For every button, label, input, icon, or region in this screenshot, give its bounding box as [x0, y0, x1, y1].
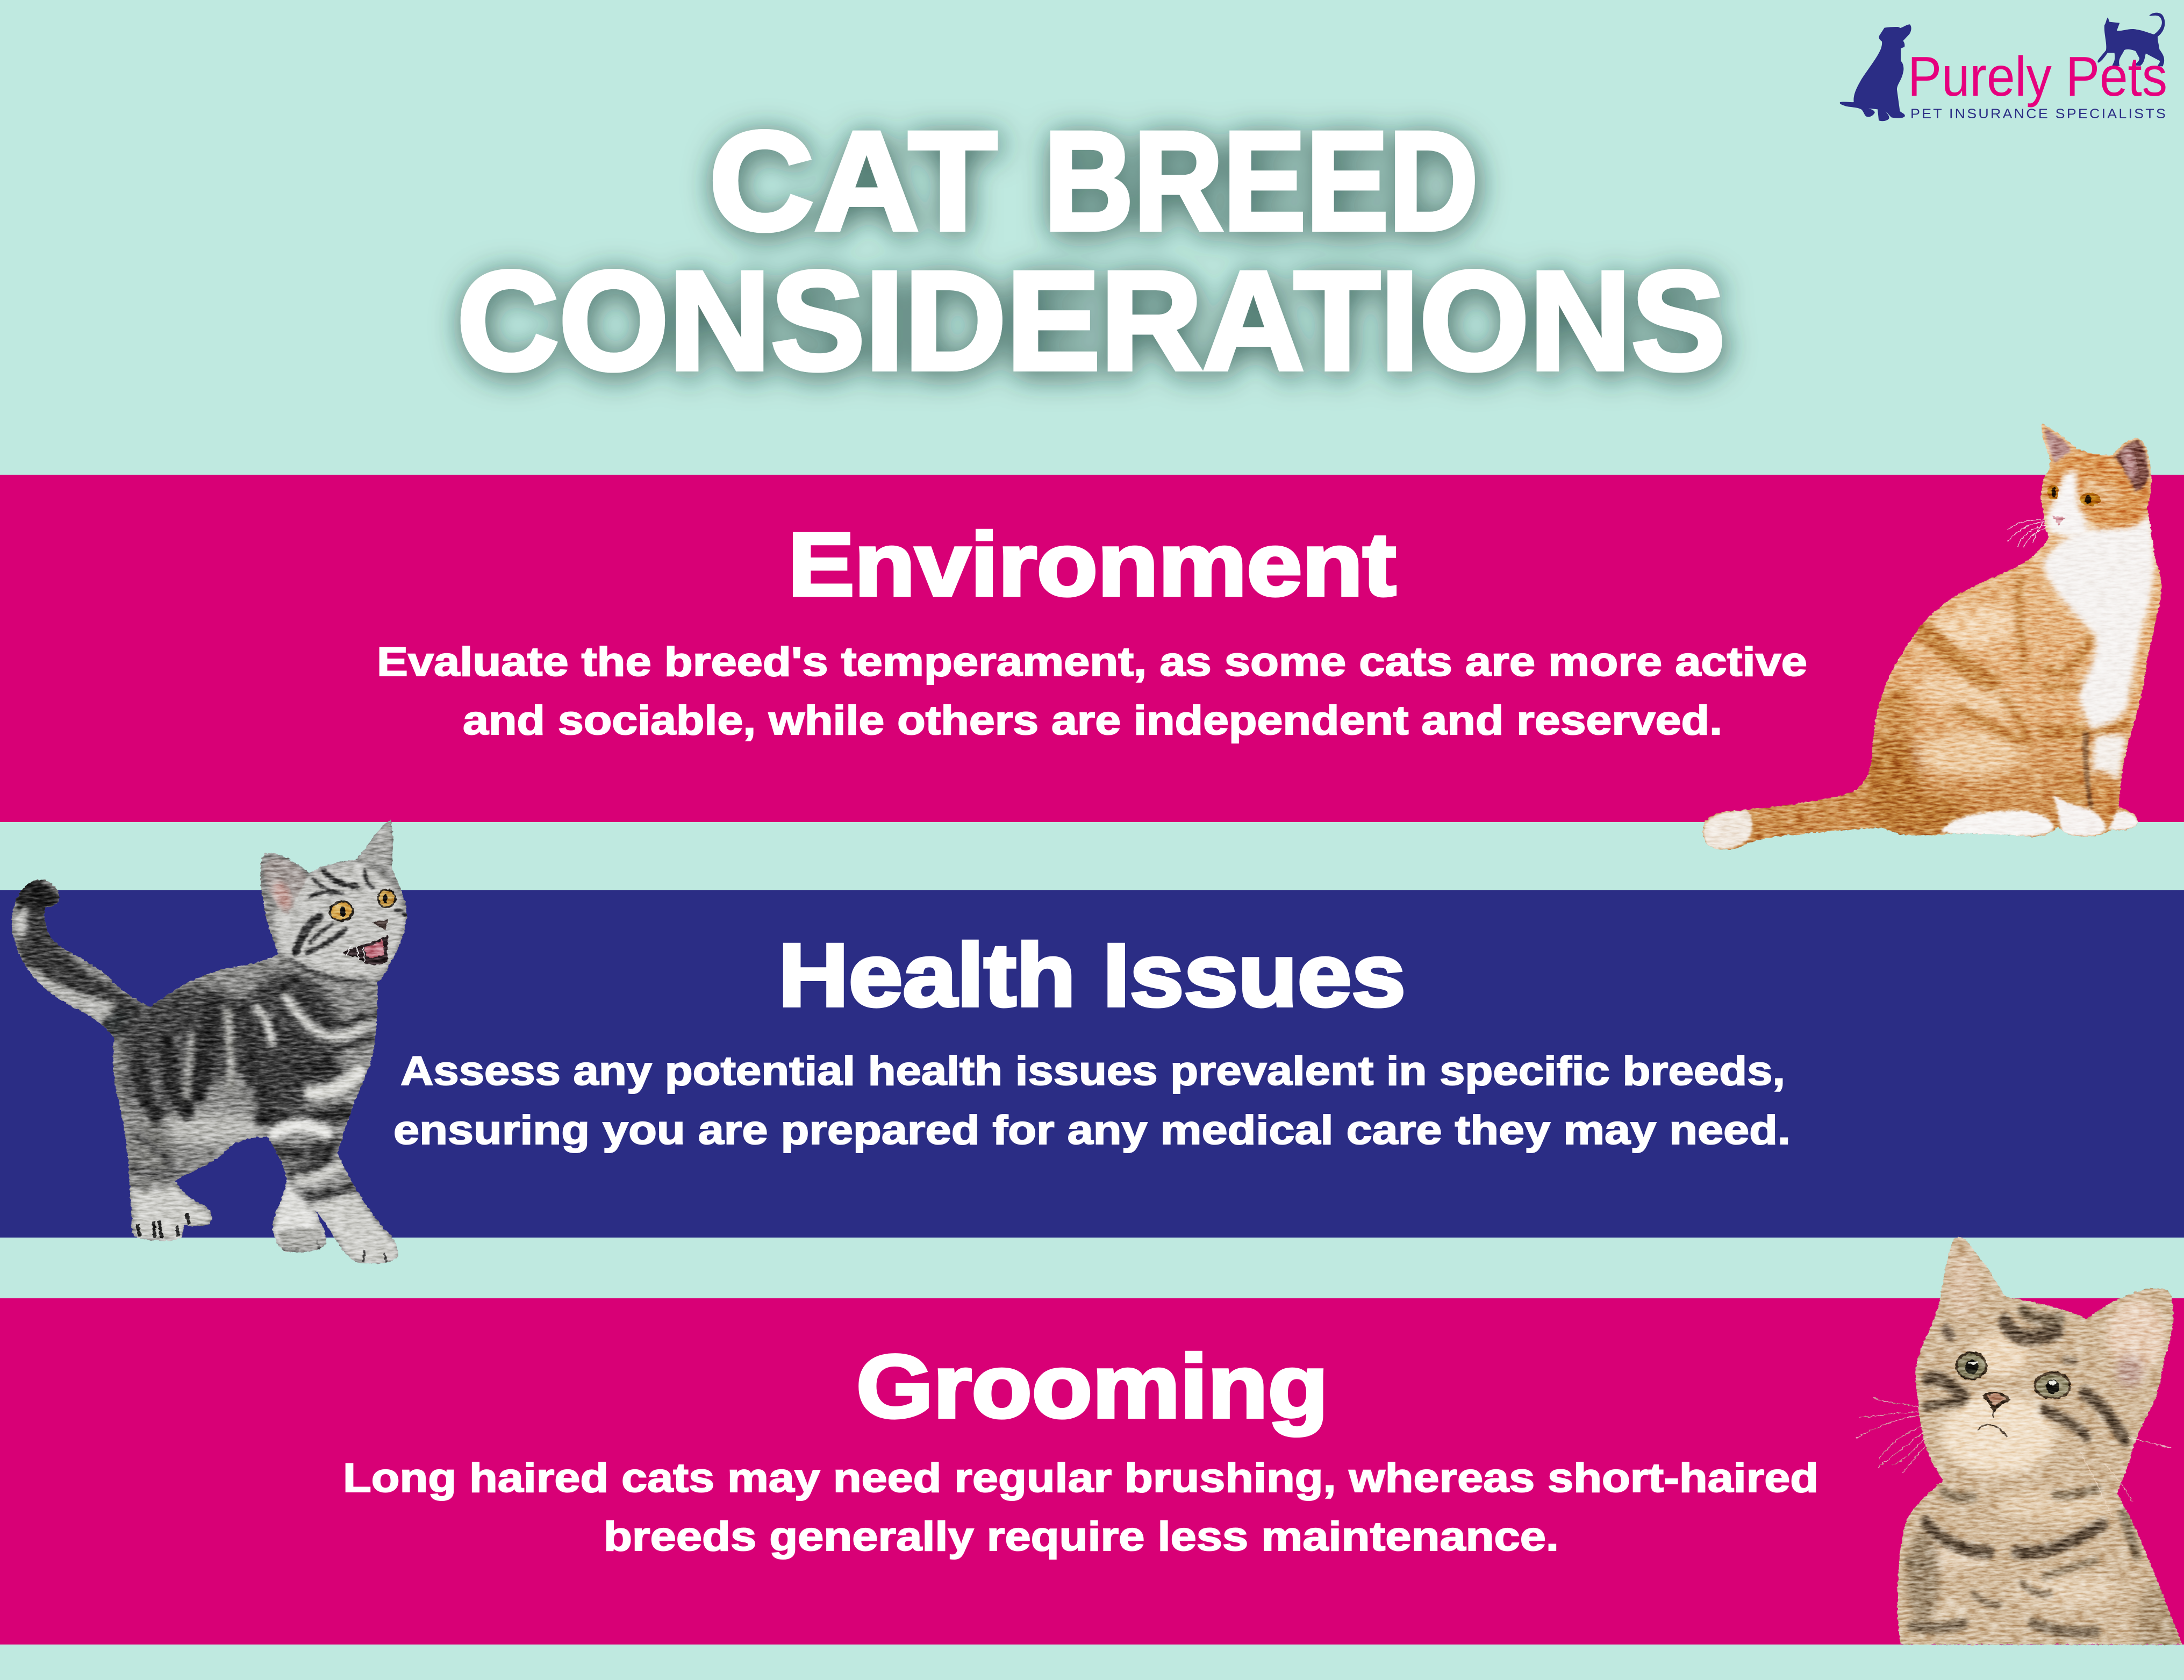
title: CAT — [709, 102, 997, 260]
head — [2044, 452, 2151, 528]
text: grooming description: breeds generally require less maintenance. — [604, 1514, 1559, 1560]
panel: environment — [0, 475, 2184, 822]
text: health issues description: ensuring you are prepared for any medical care they may need. — [393, 1107, 1791, 1153]
nose and mouth — [371, 919, 388, 930]
panel: grooming — [0, 1298, 2184, 1645]
text: grooming description — [343, 1455, 1818, 1560]
panel: health issues — [0, 890, 2184, 1238]
text: environment description: and sociable, while others are independent and reserved. — [463, 698, 1722, 744]
nose and mouth — [1982, 1392, 2010, 1412]
paws — [1940, 810, 2053, 837]
text: environment description: Evaluate the breed's temperament, as some cats are more active — [377, 639, 1807, 685]
text: health issues description: Assess any potential health issues prevalent in specific breeds, — [400, 1048, 1785, 1094]
heading: health issues: Health Issues — [778, 926, 1406, 1025]
heading: environment: Environment — [788, 515, 1396, 614]
whiskers — [1856, 1397, 2171, 1517]
body markings — [118, 973, 340, 1190]
title — [457, 102, 1725, 399]
eyes — [329, 900, 354, 921]
title: BREED — [1044, 102, 1478, 260]
logo tagline: PET INSURANCE SPECIALISTS — [1910, 106, 2167, 121]
eyes — [1956, 1352, 1987, 1380]
icon: dog silhouette — [1840, 24, 1911, 121]
logo: Purely Pets — [1840, 13, 2167, 121]
title: CONSIDERATIONS — [457, 242, 1725, 399]
text: grooming description: Long haired cats may need regular brushing, whereas short-haired — [343, 1455, 1818, 1501]
tail shading — [12, 879, 151, 1037]
whiskers — [2008, 519, 2047, 547]
cat photo: silver tabby kitten — [12, 820, 407, 1263]
text: health issues description — [393, 1048, 1791, 1153]
text: environment description — [377, 639, 1807, 744]
cat photo: ginger and white cat — [1703, 424, 2161, 849]
heading: grooming: Grooming — [856, 1337, 1328, 1436]
cat photo: tabby kitten portrait — [1856, 1236, 2182, 1664]
legs and paws — [132, 1184, 211, 1241]
white chest — [2042, 515, 2154, 730]
head — [274, 861, 406, 978]
icon: cat silhouette — [2097, 13, 2165, 66]
